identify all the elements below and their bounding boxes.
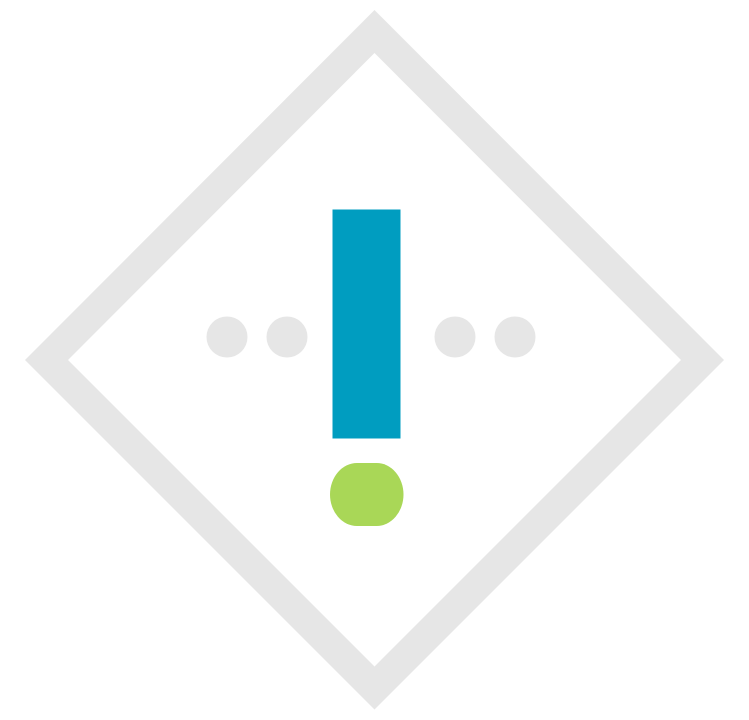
exclamation dot [330, 463, 404, 526]
exclamation bar [332, 210, 400, 438]
right dots [434, 316, 536, 358]
left dots [206, 316, 308, 358]
